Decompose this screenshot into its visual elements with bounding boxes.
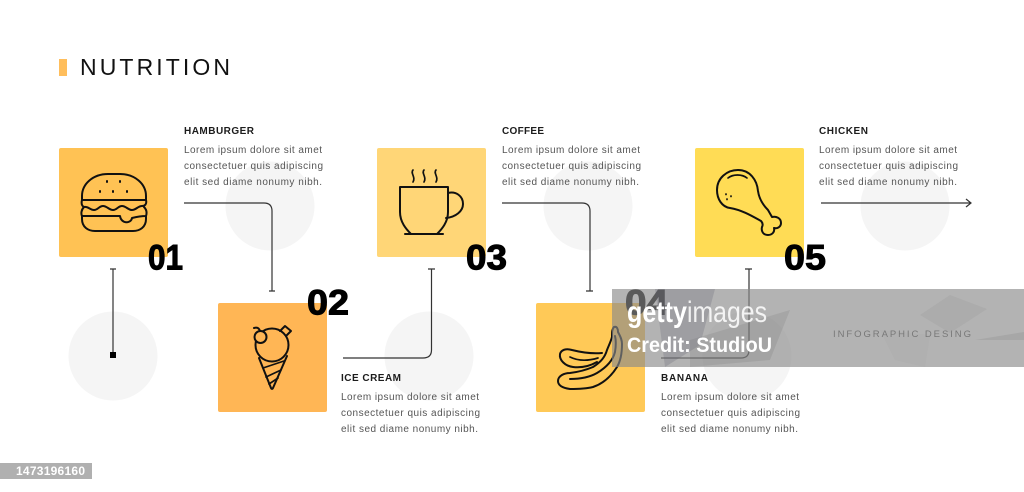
text: hamburger: consectetuer quis adipiscing [184,161,323,172]
connector: 3 to 4 [502,203,593,291]
icon: hamburger [81,174,147,231]
icon: banana [558,327,622,389]
text: banana: consectetuer quis adipiscing [661,408,800,419]
icon: coffee [400,170,463,234]
panel: hamburger [59,126,323,278]
heading: hamburger: HAMBURGER [184,126,255,137]
image id tag [0,463,92,479]
watermark logo [627,296,772,357]
text: coffee [502,145,641,188]
connector: 1 to 2 [184,203,275,291]
text: coffee: consectetuer quis adipiscing [502,161,641,172]
number 04: 04 [625,284,669,322]
arrow [821,199,971,207]
panel: chicken [695,126,958,278]
heading: coffee: COFFEE [502,126,544,137]
text: ice cream: elit sed diame nonumy nibh. [341,424,478,435]
number 05: 05 [784,238,826,278]
panel: ice cream [218,284,480,435]
text: chicken: consectetuer quis adipiscing [819,161,958,172]
watermark logo: getty [627,296,687,329]
text: ice cream: consectetuer quis adipiscing [341,408,480,419]
text: chicken [819,145,958,188]
text: coffee: elit sed diame nonumy nibh. [502,177,639,188]
icon: ice cream [254,326,291,389]
text: banana [661,392,800,435]
text: banana: Lorem ipsum dolore sit amet [661,392,799,403]
heading: ice cream: ICE CREAM [341,373,401,384]
background circles [68,162,950,400]
number 02: 02 [307,284,349,322]
text: chicken: Lorem ipsum dolore sit amet [819,145,957,156]
icon: chicken [717,170,781,235]
panel: coffee [377,126,641,278]
text: hamburger: Lorem ipsum dolore sit amet [184,145,322,156]
watermark band [612,289,1024,367]
panel: banana [536,284,800,435]
title: NUTRITION [80,54,230,80]
image id tag: 1473196160 [16,464,85,478]
text: hamburger: elit sed diame nonumy nibh. [184,177,322,188]
text: ice cream [341,392,480,435]
watermark logo: images [687,296,767,329]
text: ice cream: Lorem ipsum dolore sit amet [341,392,479,403]
text: hamburger [184,145,323,188]
watermark logo: Credit: StudioU [627,334,772,357]
connector: 4 to 5 [661,269,752,358]
heading: chicken: CHICKEN [819,126,868,137]
text: chicken: elit sed diame nonumy nibh. [819,177,957,188]
heading: banana: BANANA [661,373,708,384]
text: coffee: Lorem ipsum dolore sit amet [502,145,640,156]
connector: start [110,269,116,358]
text: banana: elit sed diame nonumy nibh. [661,424,798,435]
connector: 2 to 3 [343,269,435,358]
number 01: 01 [148,238,183,278]
number 03: 03 [466,238,507,278]
caption: INFOGRAPHIC DESING [833,329,971,340]
